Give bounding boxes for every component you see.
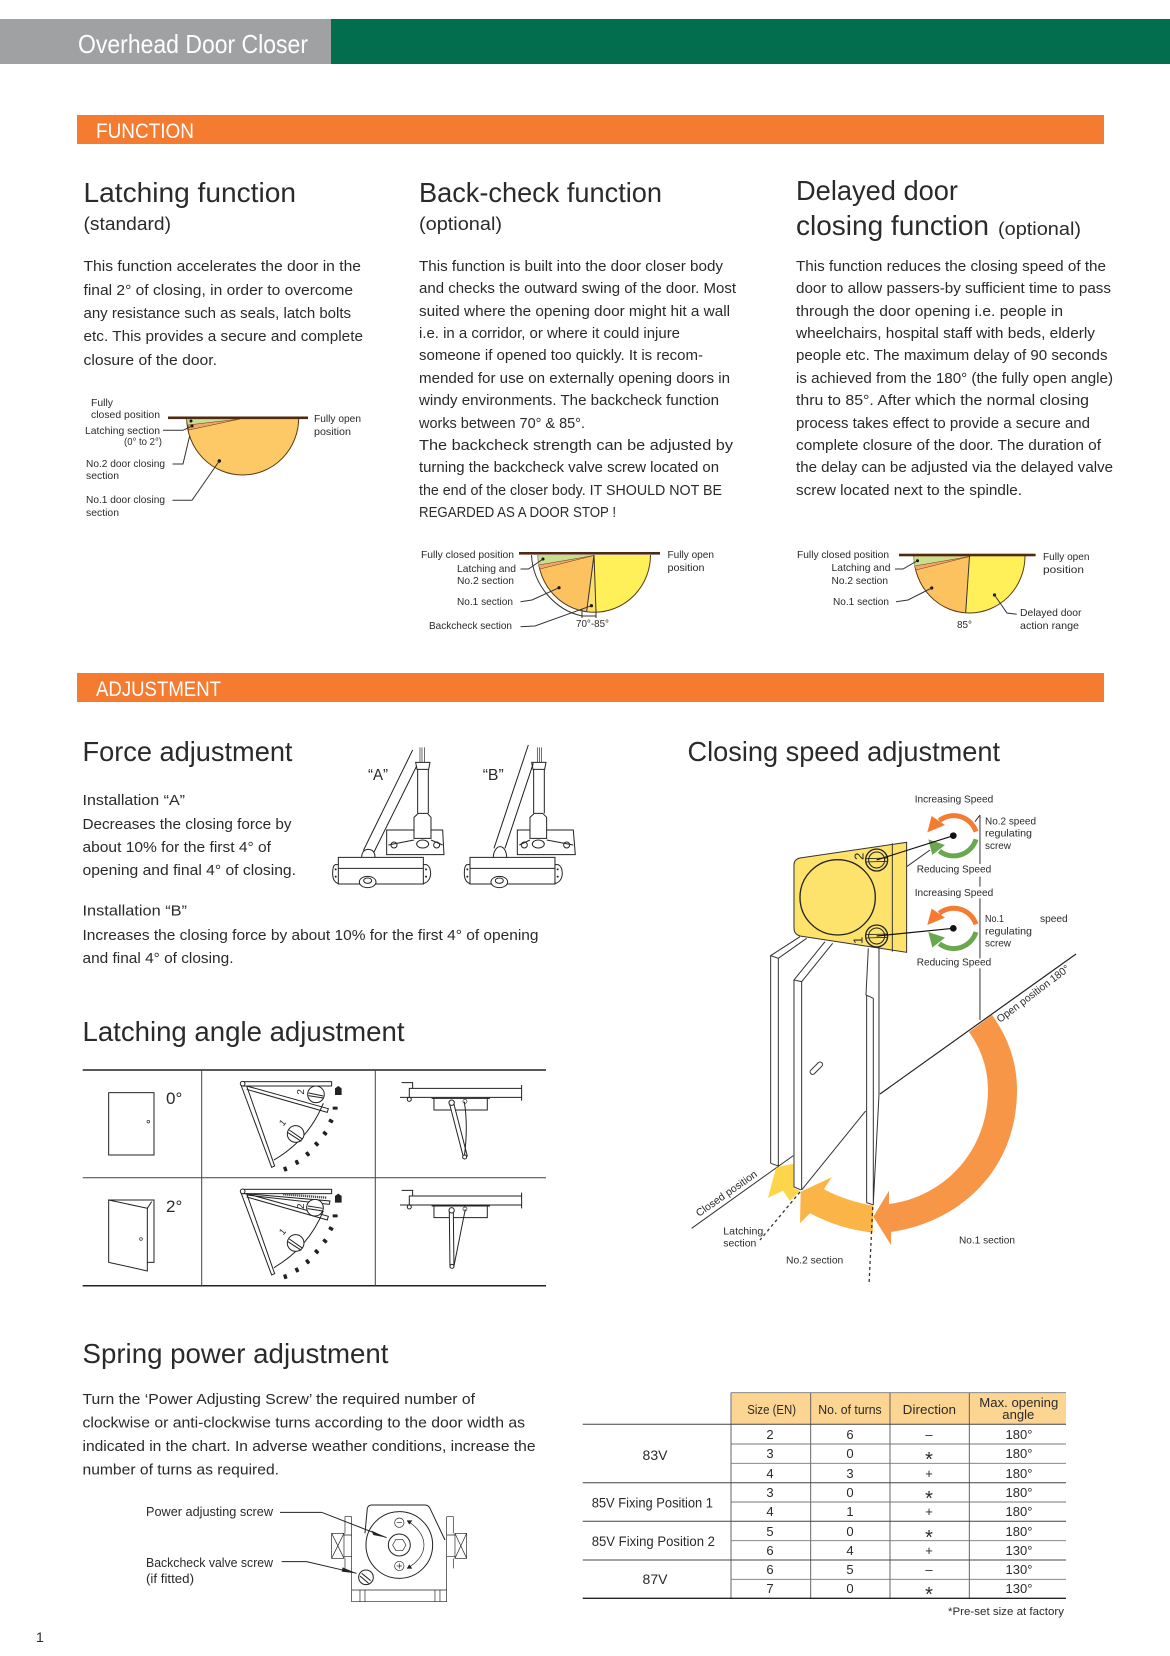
- labels: No.1: [985, 913, 1004, 925]
- chart: back-check diagram: Latching and: [457, 563, 516, 575]
- text block: force adjustment: [82, 793, 538, 967]
- heading: latching function: (standard): [84, 214, 171, 234]
- speed arrows No.2: [877, 816, 976, 860]
- table values: *: [925, 1584, 933, 1606]
- header band: [0, 19, 1170, 64]
- table: latching angle adjustment: 0°: [166, 1089, 182, 1108]
- text block: delayed door closing function: is achieved from the 180° (the fully open angle): [796, 371, 1113, 387]
- dotted lines: [760, 1192, 873, 1285]
- labels: Increasing Speed: [915, 794, 993, 806]
- table: latching angle adjustment: [83, 1070, 546, 1286]
- text block: force adjustment: Installation “B”: [82, 904, 187, 920]
- speed arrows No.1: [877, 908, 976, 949]
- labels: Reducing Speed: [917, 864, 991, 876]
- table header: angle: [1002, 1407, 1034, 1422]
- text block: back-check function: the end of the closer body. IT SHOULD NOT BE: [419, 483, 722, 499]
- table values: –: [925, 1562, 933, 1577]
- text block: force adjustment: Increases the closing force by about 10% for the first 4° of opening: [82, 928, 538, 944]
- table values: [766, 1427, 1032, 1606]
- adjuster sector 2 degrees: 2: [296, 1203, 307, 1209]
- table values: 6: [766, 1562, 774, 1577]
- labels: Closed position: [694, 1168, 760, 1219]
- table values: 1: [846, 1504, 854, 1519]
- adjuster sector 2 degrees: 1: [277, 1227, 288, 1237]
- row labels: 83V: [643, 1447, 668, 1463]
- top view closer 2 degrees: [400, 1190, 522, 1268]
- heading: spring power adjustment: Spring power adjustment: [82, 1338, 389, 1369]
- title: Overhead Door Closer: [78, 29, 308, 59]
- closer body: 2: [851, 853, 866, 860]
- adjuster sector 2 degrees: [240, 1189, 342, 1279]
- chart: delayed closing diagram: 85°: [957, 619, 972, 631]
- text block: delayed door closing function: door to allow passers-by sufficient time to pass: [796, 281, 1111, 297]
- table: latching angle adjustment: 2°: [166, 1197, 182, 1216]
- table grid: [731, 1393, 969, 1598]
- closer B: [464, 745, 575, 888]
- table values: 4: [846, 1543, 854, 1558]
- chart: latching diagram: section: [86, 470, 119, 482]
- closer A: [333, 747, 444, 888]
- table values: 4: [766, 1466, 774, 1481]
- table header: No. of turns: [818, 1402, 882, 1417]
- table values: 5: [846, 1562, 854, 1577]
- text block: delayed door closing function: the delay can be adjusted via the delayed valve: [796, 460, 1113, 476]
- text block: force adjustment: Installation “A”: [82, 793, 185, 809]
- chart: back-check diagram: 70°-85°: [576, 618, 609, 630]
- text block: back-check function: The backcheck strength can be adjusted by: [419, 438, 734, 454]
- table values: 3: [766, 1485, 774, 1500]
- table values: 2: [766, 1427, 774, 1442]
- labels: screw: [985, 938, 1011, 950]
- text block: spring power adjustment: Turn the ‘Power Adjusting Screw’ the required number of: [82, 1392, 476, 1408]
- chart: latching diagram: (0° to 2°): [124, 436, 162, 448]
- row labels: [592, 1447, 715, 1587]
- text block: force adjustment: opening and final 4° of closing.: [82, 863, 296, 879]
- chart: latching diagram: No.2 door closing: [86, 458, 165, 470]
- table values: 0: [846, 1581, 854, 1596]
- heading: back-check function: [419, 177, 662, 234]
- table values: 3: [766, 1446, 774, 1461]
- heading: force adjustment: Force adjustment: [82, 736, 293, 767]
- table values: *: [925, 1527, 933, 1549]
- closer body: 1: [850, 937, 865, 944]
- chart: delayed closing diagram: position: [1043, 564, 1084, 576]
- section bar: adjustment: ADJUSTMENT: [96, 678, 221, 701]
- table values: 4: [766, 1504, 774, 1519]
- labels: Latching: [723, 1225, 763, 1237]
- chart: delayed closing diagram: No.1 section: [833, 596, 889, 608]
- heading: delayed door closing function: Delayed door: [796, 175, 958, 206]
- table header: Max. opening: [979, 1395, 1058, 1410]
- chart: latching diagram: closed position: [91, 409, 160, 421]
- table values: 130°: [1006, 1543, 1032, 1558]
- text block: back-check function: works between 70° & 85°.: [418, 416, 585, 432]
- chart: delayed closing diagram: Fully open: [1043, 551, 1090, 563]
- open and closed swing lines: [880, 954, 1076, 1094]
- table values: 0: [846, 1446, 854, 1461]
- table values: 6: [846, 1427, 854, 1442]
- illustration: power adjusting screw: Power adjusting screw: [146, 1505, 274, 1519]
- illustration: closing speed door diagram: [692, 794, 1076, 1285]
- adjuster sector 0 degrees: 2: [296, 1089, 307, 1095]
- table values: 6: [766, 1543, 774, 1558]
- chart: delayed closing diagram: Fully closed position: [797, 549, 889, 561]
- text block: back-check function: mended for use on externally opening doors in: [419, 371, 730, 387]
- text block: back-check function: and checks the outward swing of the door. Most: [419, 281, 736, 297]
- text block: delayed door closing function: process takes effect to provide a secure and: [796, 416, 1090, 432]
- table header: [732, 1393, 1066, 1424]
- labels: No.1 section: [959, 1235, 1015, 1247]
- illustration: installation A and B closers: [333, 745, 575, 888]
- heading: delayed door closing function: [796, 175, 1081, 241]
- table header: Size (EN): [747, 1402, 796, 1417]
- chart: back-check diagram: Fully open: [668, 549, 714, 561]
- illustration: power adjusting screw: (if fitted): [146, 1572, 194, 1586]
- section bar: function: FUNCTION: [96, 120, 194, 143]
- text block: latching function: This function accelerates the door in the: [84, 259, 361, 275]
- text block: delayed door closing function: thru to 85°. After which the normal closing: [796, 393, 1089, 409]
- illustration: installation A and B closers: “A”: [368, 767, 388, 784]
- table header: Direction: [903, 1402, 956, 1417]
- labels: [694, 794, 1072, 1267]
- heading: back-check function: (optional): [419, 214, 502, 234]
- labels: Increasing Speed: [915, 887, 993, 899]
- page number: 1: [36, 1629, 44, 1645]
- table values: 0: [846, 1485, 854, 1500]
- text block: force adjustment: Decreases the closing force by: [82, 817, 292, 833]
- adjuster sector 0 degrees: [240, 1081, 342, 1172]
- section bar: function: [77, 115, 1104, 144]
- row labels: 87V: [643, 1571, 668, 1587]
- text block: latching function: final 2° of closing, in order to overcome: [84, 283, 353, 299]
- text block: spring power adjustment: [82, 1392, 536, 1478]
- table values: 180°: [1006, 1524, 1032, 1539]
- text block: latching function: [84, 259, 363, 369]
- text block: delayed door closing function: complete closure of the door. The duration of: [796, 438, 1102, 454]
- chart: delayed closing diagram: action range: [1020, 620, 1079, 632]
- table values: 180°: [1006, 1466, 1032, 1481]
- text block: force adjustment: and final 4° of closing.: [82, 951, 234, 967]
- adjuster sector 0 degrees: 1: [277, 1118, 288, 1128]
- section bar: adjustment: [77, 673, 1104, 702]
- text block: latching function: closure of the door.: [84, 353, 217, 369]
- text block: latching function: any resistance such as seals, latch bolts: [84, 306, 351, 322]
- text block: back-check function: i.e. in a corridor, or where it could injure: [419, 326, 680, 342]
- chart: back-check diagram: Backcheck section: [429, 620, 512, 632]
- table values: +: [925, 1543, 933, 1558]
- illustration: installation A and B closers: “B”: [483, 767, 504, 784]
- closer body: [794, 816, 976, 952]
- chart: delayed closing diagram: No.2 section: [832, 575, 888, 587]
- text block: delayed door closing function: wheelchairs, hospital staff with beds, elderly: [795, 326, 1096, 342]
- table values: 3: [846, 1466, 854, 1481]
- heading: delayed door closing function: closing function: [796, 210, 989, 241]
- text block: back-check function: This function is built into the door closer body: [419, 259, 724, 275]
- heading: latching angle adjustment: Latching angle adjustment: [82, 1016, 405, 1047]
- text block: spring power adjustment: clockwise or anti-clockwise turns according to the door width as: [82, 1416, 525, 1432]
- table values: +: [925, 1504, 933, 1519]
- labels: Open position 180°: [995, 963, 1072, 1025]
- text block: delayed door closing function: people etc. The maximum delay of 90 seconds: [796, 348, 1108, 364]
- text block: delayed door closing function: [795, 259, 1113, 499]
- table values: 7: [766, 1581, 774, 1596]
- chart: back-check diagram: No.2 section: [457, 575, 514, 587]
- table values: 180°: [1006, 1504, 1032, 1519]
- table values: 5: [766, 1524, 774, 1539]
- text block: spring power adjustment: number of turns as required.: [82, 1462, 279, 1478]
- row labels: 85V Fixing Position 1: [592, 1495, 713, 1511]
- table values: 180°: [1006, 1485, 1032, 1500]
- chart: latching diagram: No.1 door closing: [86, 494, 165, 506]
- table values: *: [925, 1449, 933, 1471]
- swing arrow: No.1 section: [873, 1015, 1017, 1245]
- labels: regulating: [985, 925, 1032, 937]
- swing arrow: No.2 section: [800, 1177, 873, 1233]
- text block: spring power adjustment: indicated in the chart. In adverse weather conditions, increase the: [82, 1439, 536, 1455]
- text block: back-check function: windy environments. The backcheck function: [418, 393, 719, 409]
- top view closer 0 degrees: [400, 1083, 522, 1159]
- text block: back-check function: someone if opened too quickly. It is recom-: [419, 348, 703, 364]
- text block: back-check function: suited where the opening door might hit a wall: [419, 304, 730, 320]
- table values: 180°: [1006, 1446, 1032, 1461]
- text block: back-check function: [418, 259, 736, 521]
- door icons: [109, 1093, 154, 1271]
- heading: latching function: [84, 177, 296, 234]
- chart: delayed closing diagram: Latching and: [832, 562, 891, 574]
- labels: speed: [1040, 913, 1068, 925]
- labels: No.2 speed: [985, 815, 1036, 827]
- chart: back-check diagram: position: [668, 562, 705, 574]
- labels: screw: [985, 840, 1011, 852]
- text block: force adjustment: about 10% for the first 4° of: [82, 840, 272, 856]
- table values: 0: [846, 1524, 854, 1539]
- chart: latching diagram: section: [86, 507, 119, 519]
- illustration: power adjusting screw: Backcheck valve screw: [146, 1556, 274, 1570]
- table: spring power settings: [583, 1393, 1066, 1618]
- chart: back-check diagram: Fully closed position: [421, 549, 514, 561]
- labels: Reducing Speed: [917, 957, 991, 969]
- labels: No.2 section: [786, 1255, 843, 1267]
- text block: latching function: etc. This provides a secure and complete: [84, 329, 363, 345]
- table values: 130°: [1006, 1581, 1032, 1596]
- table values: 130°: [1006, 1562, 1032, 1577]
- chart: latching diagram: [85, 397, 361, 519]
- door outlines: [692, 815, 980, 1228]
- heading: closing speed adjustment: Closing speed adjustment: [688, 736, 1000, 767]
- heading: delayed door closing function: (optional): [998, 219, 1081, 239]
- heading: back-check function: Back-check function: [419, 177, 662, 208]
- table values: 180°: [1006, 1427, 1032, 1442]
- table values: –: [925, 1427, 933, 1442]
- heading: latching function: Latching function: [84, 177, 296, 208]
- footnote: *Pre-set size at factory: [948, 1606, 1065, 1618]
- text block: delayed door closing function: through the door opening i.e. people in: [796, 304, 1063, 320]
- chart: delayed closing diagram: [797, 549, 1090, 632]
- chart: latching diagram: position: [314, 426, 351, 438]
- chart: back-check diagram: [421, 549, 714, 632]
- table values: +: [925, 1466, 933, 1481]
- illustration: power adjusting screw: [146, 1505, 467, 1602]
- swing arrow: latching section: [768, 1164, 800, 1201]
- text block: delayed door closing function: screw located next to the spindle.: [796, 483, 1022, 499]
- labels: regulating: [985, 828, 1032, 840]
- chart: delayed closing diagram: Delayed door: [1020, 607, 1082, 619]
- text block: back-check function: REGARDED AS A DOOR STOP !: [419, 505, 616, 521]
- chart: latching diagram: Fully: [91, 397, 114, 409]
- text block: delayed door closing function: This function reduces the closing speed of the: [796, 259, 1106, 275]
- chart: latching diagram: Latching section: [85, 425, 160, 437]
- chart: back-check diagram: No.1 section: [457, 596, 513, 608]
- chart: latching diagram: Fully open: [314, 413, 361, 425]
- row labels: 85V Fixing Position 2: [592, 1533, 715, 1549]
- table values: *: [925, 1488, 933, 1510]
- text block: back-check function: turning the backcheck valve screw located on: [419, 460, 719, 476]
- labels: section: [723, 1238, 756, 1250]
